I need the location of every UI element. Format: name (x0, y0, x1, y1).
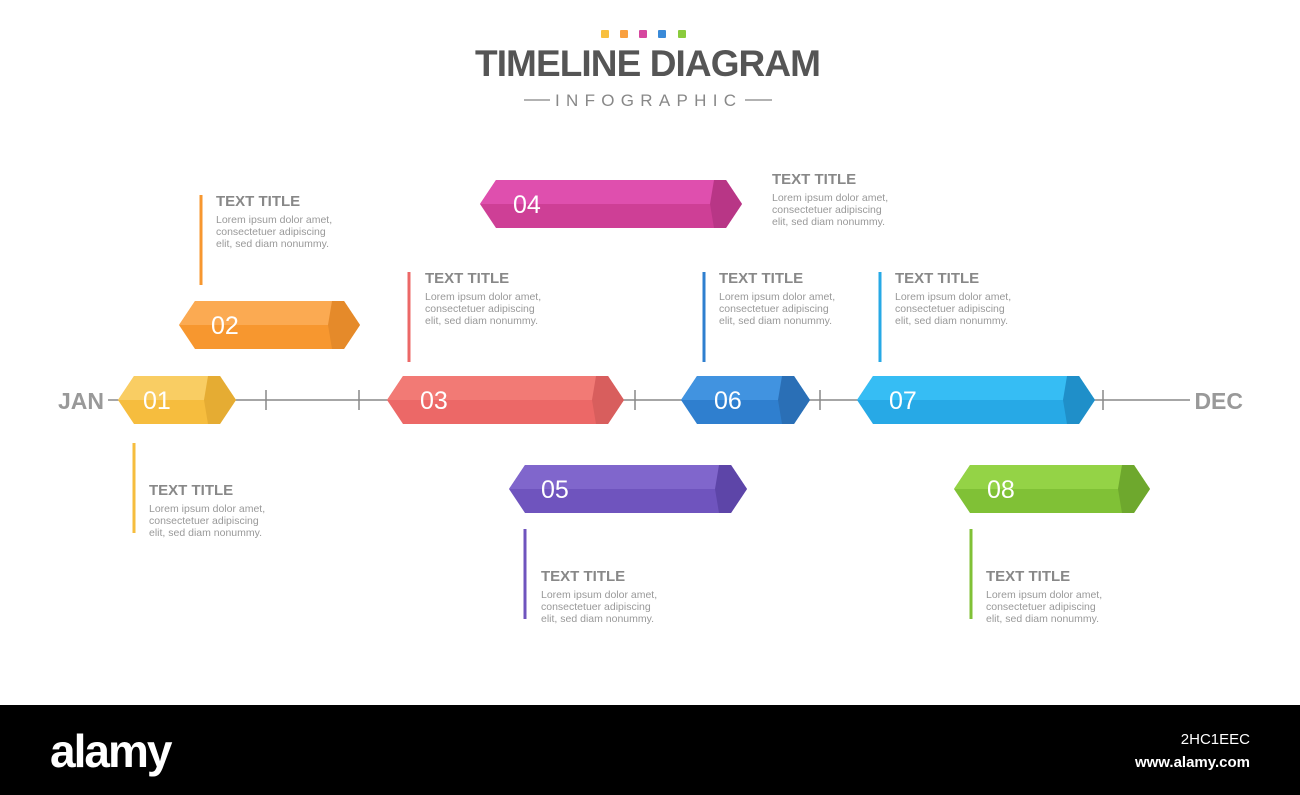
text block 01: TEXT TITLE (149, 482, 233, 499)
text block 07: Lorem ipsum dolor amet, (895, 291, 1011, 303)
text block 05 (525, 529, 657, 625)
label JAN: JAN (58, 388, 104, 414)
text block 07 (880, 270, 1011, 362)
timeline axis (108, 390, 1190, 410)
footer logo: alamy (50, 725, 173, 777)
text block 04: Lorem ipsum dolor amet, (772, 192, 888, 204)
bar 01: 01 (143, 387, 171, 415)
text block 03: TEXT TITLE (425, 270, 509, 287)
bar 06: 06 (714, 387, 742, 415)
bar 08: 08 (987, 476, 1015, 504)
text block 02: Lorem ipsum dolor amet, (216, 214, 332, 226)
text block 06 (704, 270, 835, 362)
footer url: www.alamy.com (1134, 754, 1250, 771)
text block 03: elit, sed diam nonummy. (425, 315, 538, 327)
text block 05: Lorem ipsum dolor amet, (541, 589, 657, 601)
text block 05: TEXT TITLE (541, 568, 625, 585)
text block 04 (772, 171, 888, 228)
text block 03: Lorem ipsum dolor amet, (425, 291, 541, 303)
text block 01 (134, 443, 265, 539)
bar 01 (118, 376, 236, 424)
text block 02: TEXT TITLE (216, 193, 300, 210)
text block 06: consectetuer adipiscing (719, 303, 829, 315)
text block 05: consectetuer adipiscing (541, 601, 651, 613)
text block 07: TEXT TITLE (895, 270, 979, 287)
header squares (601, 30, 686, 38)
text block 07: elit, sed diam nonummy. (895, 315, 1008, 327)
text block 01: consectetuer adipiscing (149, 515, 259, 527)
text block 01: Lorem ipsum dolor amet, (149, 503, 265, 515)
text block 08: consectetuer adipiscing (986, 601, 1096, 613)
text block 04: TEXT TITLE (772, 171, 856, 188)
bar 08 (954, 465, 1150, 513)
text block 01: elit, sed diam nonummy. (149, 527, 262, 539)
text block 08: Lorem ipsum dolor amet, (986, 589, 1102, 601)
text block 02: elit, sed diam nonummy. (216, 238, 329, 250)
text block 08: TEXT TITLE (986, 568, 1070, 585)
text block 07: consectetuer adipiscing (895, 303, 1005, 315)
bar 03 (387, 376, 624, 424)
text block 06: TEXT TITLE (719, 270, 803, 287)
text block 04: consectetuer adipiscing (772, 204, 882, 216)
bar 05 (509, 465, 747, 513)
text block 08: elit, sed diam nonummy. (986, 613, 1099, 625)
subtitle: INFOGRAPHIC (555, 91, 741, 110)
text block 05: elit, sed diam nonummy. (541, 613, 654, 625)
text block 08 (971, 529, 1102, 625)
footer image id: 2HC1EEC (1181, 731, 1250, 748)
text block 03: consectetuer adipiscing (425, 303, 535, 315)
bar 03: 03 (420, 387, 448, 415)
footer bar (0, 705, 1300, 795)
bar 06 (681, 376, 810, 424)
title: TIMELINE DIAGRAM (475, 43, 821, 84)
bar 02 (179, 301, 360, 349)
text block 02 (201, 193, 332, 285)
bar 07: 07 (889, 387, 917, 415)
text block 03 (409, 270, 541, 362)
bar 05: 05 (541, 476, 569, 504)
text block 06: elit, sed diam nonummy. (719, 315, 832, 327)
label DEC: DEC (1194, 388, 1243, 414)
bar 02: 02 (211, 312, 239, 340)
text block 04: elit, sed diam nonummy. (772, 216, 885, 228)
bar 04 (480, 180, 742, 228)
bar 07 (857, 376, 1095, 424)
bar 04: 04 (513, 191, 541, 219)
text block 02: consectetuer adipiscing (216, 226, 326, 238)
text block 06: Lorem ipsum dolor amet, (719, 291, 835, 303)
